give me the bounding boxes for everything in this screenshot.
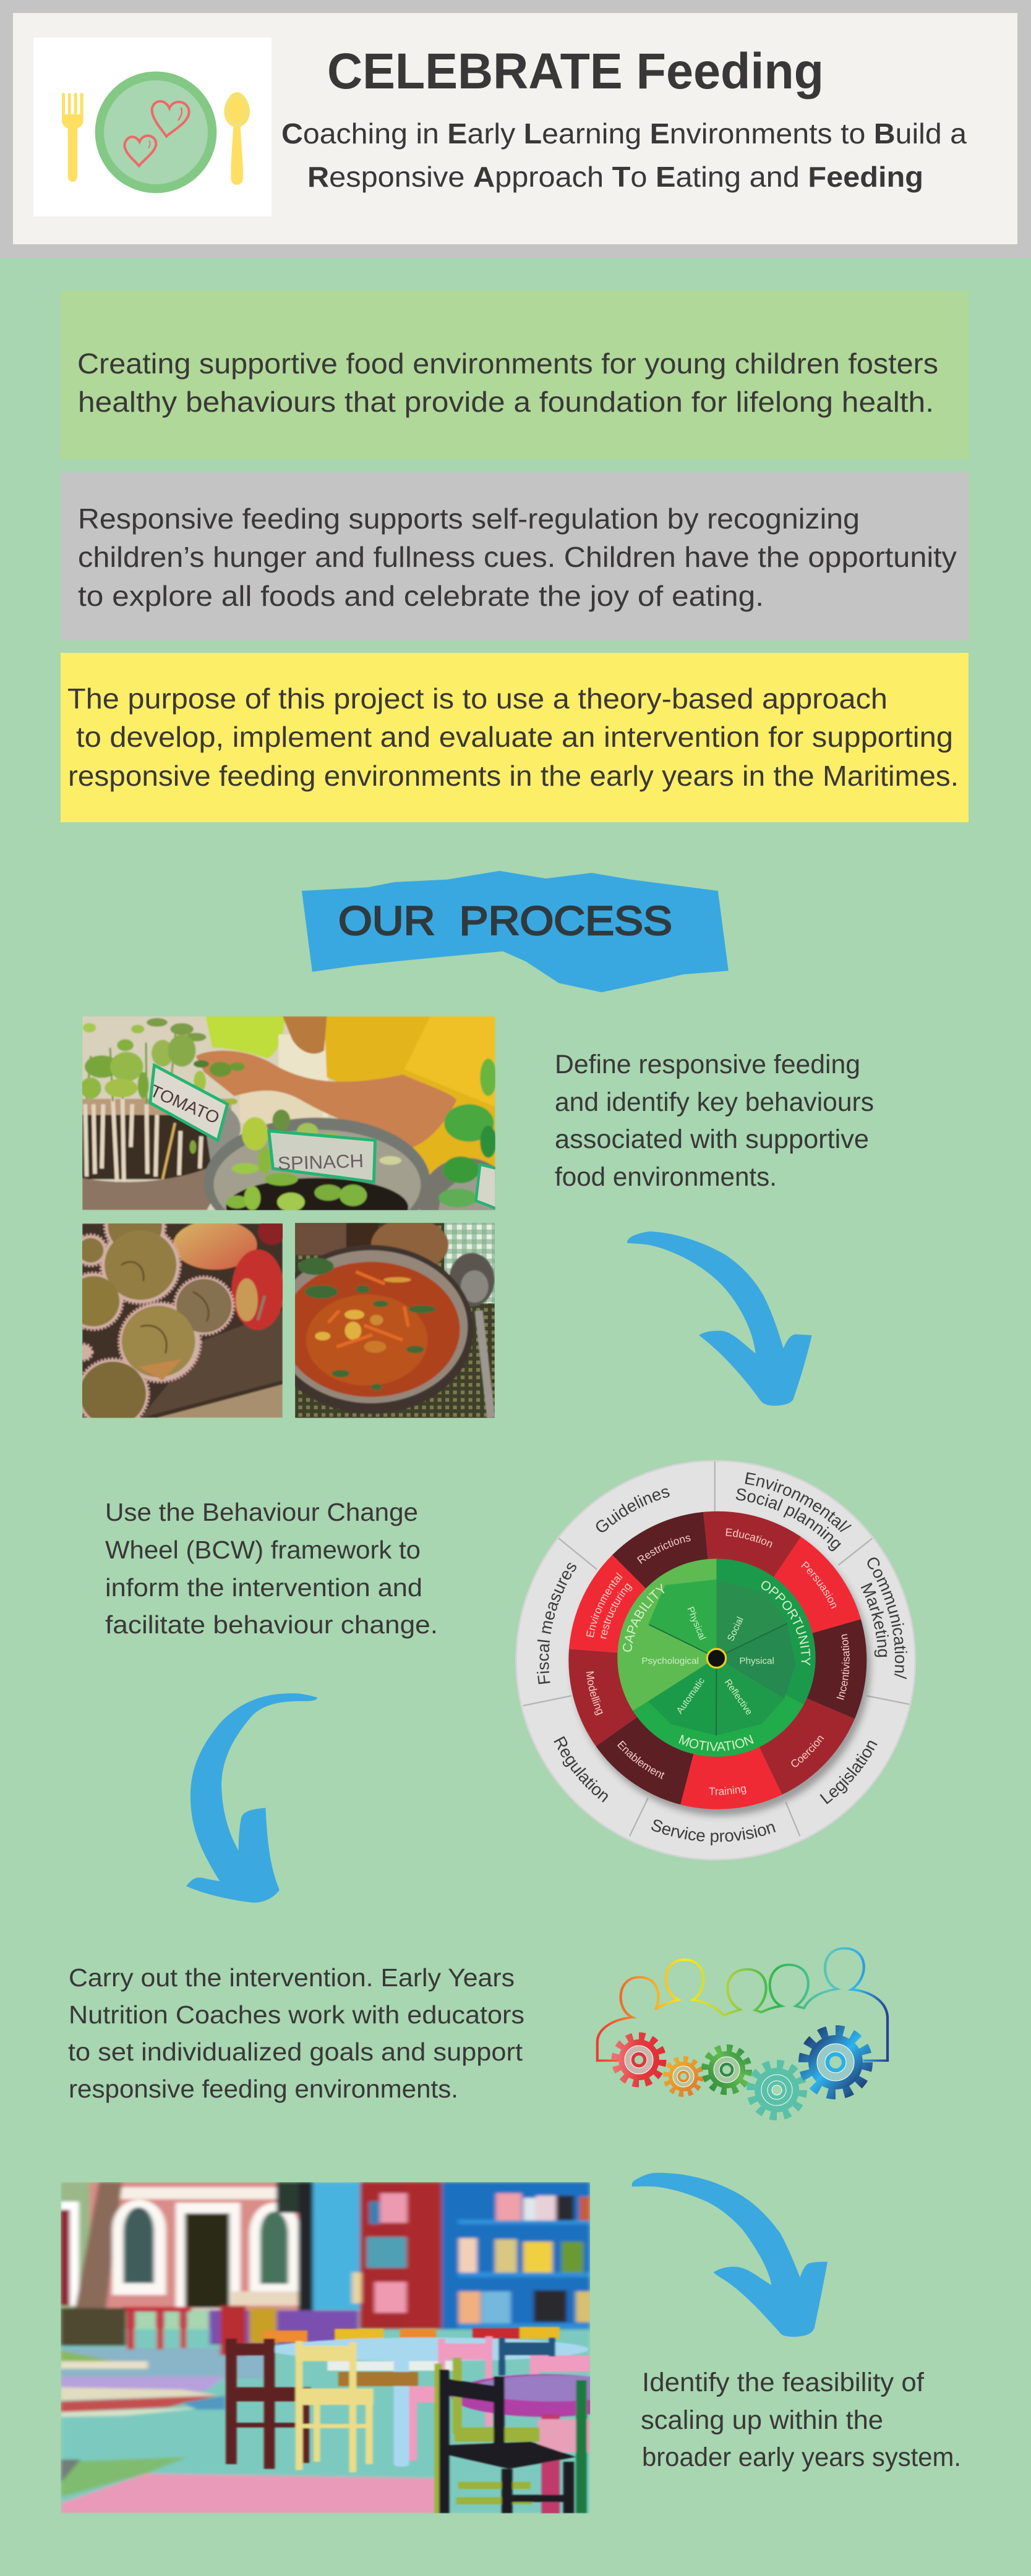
title: CELEBRATE Feeding [327,43,824,100]
middle ring: intervention functions: Coercion [792,1736,824,1767]
people outline [597,1949,888,2060]
black chair [439,2370,576,2514]
panel: project purpose: The purpose of this project is to use a theory-based approach [67,682,888,715]
olive chair [434,2358,540,2514]
step 2 text: inform the intervention and [105,1573,422,1602]
photo: seedlings with tomato and spinach labels [82,1016,495,1210]
label: tomato: TOMATO [147,1081,223,1128]
label: spinach [269,1131,375,1182]
step 3 text: Nutrition Coaches work with educators [69,2000,524,2029]
navy chair [498,2337,555,2376]
step 1 text: and identify key behaviours [555,1087,874,1117]
chart: behaviour change wheel [515,1460,917,1861]
middle ring: intervention functions: Enablement [617,1741,664,1779]
panel: responsive feeding: to explore all foods and celebrate the joy of eating. [78,580,764,612]
inner wheel: COM-B: OPPORTUNITY [755,1571,825,1672]
step 4 text: broader early years system. [642,2442,961,2472]
icon: plate [95,72,216,193]
floor [61,2329,590,2514]
icon: fork [62,93,83,182]
panel: supportive food environments: Creating supportive food environments for young children fosters [77,347,938,380]
inner wheel: COM-B: Social [725,1615,746,1643]
step 1 text: associated with supportive [555,1124,869,1154]
outer ring: policy categories: Legislation [820,1741,877,1804]
middle ring: intervention functions: Training [709,1786,747,1795]
step 3 text [68,1963,524,2103]
middle ring: intervention functions [568,1511,867,1809]
middle ring: intervention functions: restructuring [593,1578,635,1643]
panel: supportive food environments [61,291,969,459]
outer ring: policy categories [516,1460,921,1860]
outer ring: policy categories: Fiscal measures [537,1563,576,1684]
heading: our process banner: OUR PROCESS [338,898,672,943]
step 3 text: Carry out the intervention. Early Years [69,1963,515,1992]
middle ring: intervention functions: Modelling [581,1668,607,1717]
middle ring: intervention functions: Persuasion [801,1562,836,1609]
back red table [122,2307,191,2349]
middle ring: intervention functions: Education [726,1528,772,1548]
icon: spoon [224,92,250,185]
middle ring: intervention functions: Restrictions [637,1536,691,1564]
inner wheel: COM-B: Physical [685,1605,708,1641]
inner wheel: COM-B: MOTIVATION [677,1732,756,1754]
panel: responsive feeding: Responsive feeding supports self-regulation by recognizing [78,503,860,535]
step 4 text: Identify the feasibility of [642,2368,925,2397]
magenta table [449,2373,590,2418]
photo: colourful classroom tables and chairs [61,2182,640,2514]
outer ring: policy categories: Marketing [861,1583,889,1657]
gear: blue [804,2031,867,2094]
gear: red [615,2036,662,2083]
inner wheel: COM-B [617,1558,816,1757]
pink chairs [409,2336,492,2460]
heading: our process banner [302,871,729,992]
panel: project purpose: to develop, implement and evaluate an intervention for supporting [76,721,953,753]
subtitle: Coaching in Early Learning Environments to Build a [281,117,967,150]
photo: bowl of soup [295,1223,495,1418]
step 2 text: facilitate behaviour change. [105,1610,438,1639]
icon: plate with fork and spoon [33,38,272,216]
panel: supportive food environments: healthy behaviours that provide a foundation for lifelong health. [78,386,934,418]
icon: people and gears [597,1949,888,2116]
subtitle: Responsive Approach To Eating and Feeding [307,161,923,193]
panel: project purpose [61,653,969,822]
inner wheel: COM-B: CAPABILITY [612,1577,672,1658]
panel: responsive feeding: children’s hunger and fullness cues. Children have the opportunity [78,541,957,573]
blue table [269,2337,589,2361]
subtitle [281,117,967,193]
outer ring: policy categories: Communication/ [867,1558,907,1679]
step 2 text [105,1498,438,1639]
arrow: step 3 to step 4 [632,2173,828,2337]
outer ring: policy categories: Regulation [554,1736,608,1803]
outer ring: policy categories: Environmental/ [745,1473,852,1532]
yellow chair [296,2341,374,2472]
inner wheel: COM-B: Physical [739,1656,774,1667]
step 3 text: responsive feeding environments. [69,2075,458,2103]
inner wheel: COM-B: Psychological [641,1656,699,1667]
step 4 text: scaling up within the [641,2405,883,2435]
step 3 text: to set individualized goals and support [68,2038,523,2066]
step 2 text: Use the Behaviour Change [105,1498,418,1526]
middle ring: intervention functions: Incentivisation [836,1634,850,1700]
blue bookshelf [442,2182,590,2338]
outer ring: policy categories: Guidelines [596,1489,670,1532]
inner wheel: COM-B: Automatic [675,1675,707,1716]
arrow: step 1 to step 2 [627,1231,812,1406]
panel: responsive feeding [61,472,969,640]
photo: muffins and apples [82,1223,283,1418]
step 1 text: Define responsive feeding [555,1050,860,1079]
label: spinach: SPINACH [278,1150,364,1174]
label: tomato [147,1065,228,1141]
gear: orange [666,2059,701,2094]
step 4 text [641,2368,961,2472]
step 2 text: Wheel (BCW) framework to [105,1536,421,1564]
inner wheel: COM-B: Reflective [722,1677,755,1717]
step 1 text [555,1050,874,1192]
header band [0,0,1031,258]
gear: teal [751,2064,803,2116]
panel: project purpose: responsive feeding environments in the early years in the Maritimes. [68,760,959,792]
wall and building [87,2182,302,2312]
arrow: step 2 to step 3 [186,1693,317,1903]
middle ring: intervention functions: Environmental [579,1568,627,1641]
red bookshelf [360,2182,409,2334]
gear: green [705,2048,748,2091]
outer ring: policy categories: Social planning [736,1489,841,1552]
photo collage: plants, muffins, soup [82,1016,495,1418]
back chairs [264,2331,307,2342]
step 1 text: food environments. [555,1162,777,1192]
outer ring: policy categories: Service provision [651,1820,776,1846]
icon: wheel hub [707,1649,726,1668]
maroon chair [226,2339,311,2469]
